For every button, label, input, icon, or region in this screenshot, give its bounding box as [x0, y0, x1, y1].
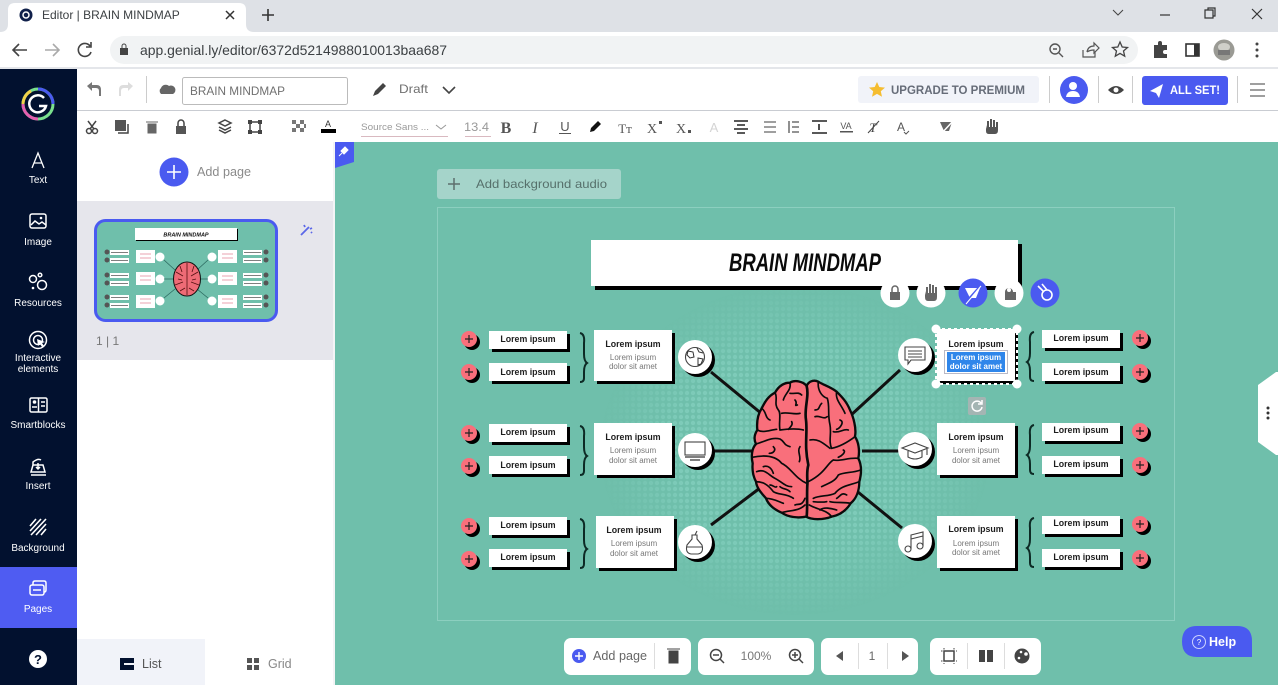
- connector lines: [711, 370, 902, 528]
- expand button: [461, 331, 480, 350]
- nav item: Smartblocks: Smartblocks: [10, 420, 66, 431]
- formatting toolbar: X: [647, 122, 657, 137]
- nav item: Insert: [25, 459, 51, 492]
- label box: Lorem ipsum: [1053, 552, 1109, 562]
- brace: [580, 519, 587, 568]
- main text box: dolor sit amet: [952, 548, 1001, 557]
- nav item: Image: [24, 214, 52, 248]
- formatting toolbar: 13.4: [464, 120, 489, 134]
- nav item: Smartblocks: [10, 398, 66, 431]
- top toolbar: Draft: [399, 82, 429, 96]
- label box: Lorem ipsum: [1053, 459, 1109, 469]
- grid tab: [205, 639, 333, 685]
- nav item: Resources: Resources: [14, 298, 62, 309]
- label box: Lorem ipsum: [500, 427, 556, 437]
- add page button: Add page: [197, 165, 251, 179]
- icon: music notes: [898, 524, 935, 561]
- add background audio button: [437, 169, 621, 199]
- nav item: Pages (active): Pages: [24, 604, 52, 615]
- label box: Lorem ipsum: [1053, 425, 1109, 435]
- nav item: Resources: [14, 273, 62, 309]
- bottom toolbar: page navigation: 1: [869, 649, 876, 663]
- brace: [1027, 332, 1034, 381]
- label box: Lorem ipsum: [1053, 333, 1109, 343]
- label box: [489, 363, 570, 384]
- label box: [1042, 423, 1123, 444]
- main text box: dolor sit amet: [952, 456, 1001, 465]
- left branch 2: [461, 423, 715, 478]
- label box: [1042, 516, 1123, 537]
- page thumbnail: [96, 220, 276, 320]
- expand button: [461, 518, 480, 537]
- page thumbnail: BRAIN MINDMAP: [163, 232, 209, 238]
- expand button: [461, 425, 480, 444]
- main text box: dolor sit amet: [610, 549, 659, 558]
- help icon: [29, 650, 47, 668]
- hand button: [916, 278, 946, 308]
- label box: [489, 424, 570, 445]
- right branch 3: [898, 516, 1151, 571]
- left branch 3: [461, 516, 715, 571]
- nav item: Insert: Insert: [25, 481, 51, 492]
- formatting toolbar: U: [560, 119, 570, 134]
- icon: flask: [678, 525, 715, 562]
- brain illustration: [752, 381, 861, 519]
- top toolbar: [77, 69, 1278, 111]
- nav item: Text: Text: [29, 175, 47, 186]
- right branch 2: [898, 423, 1151, 478]
- main text box, selected: Lorem ipsum: [951, 353, 1001, 362]
- formatting toolbar: I: [531, 120, 538, 137]
- bottom toolbar: pages: [564, 638, 691, 675]
- magnet button: [1030, 278, 1060, 308]
- main text box: Lorem ipsum: [605, 339, 661, 349]
- add background audio button: Add background audio: [476, 177, 607, 191]
- nav item: Background: [11, 519, 65, 554]
- bottom toolbar: pages: Add page: [593, 649, 647, 663]
- label box: Lorem ipsum: [500, 520, 556, 530]
- top toolbar: BRAIN MINDMAP: [190, 84, 285, 98]
- formatting toolbar: X: [676, 122, 686, 137]
- add page button: [160, 158, 251, 186]
- label box: Lorem ipsum: [500, 334, 556, 344]
- expand button: [1132, 457, 1151, 476]
- browser tab bar: Editor | BRAIN MINDMAP: [42, 8, 180, 22]
- help icon: ?: [34, 652, 42, 667]
- magic wand icon: [301, 225, 312, 235]
- nav item: Interactive elements: elements: [18, 364, 58, 375]
- top toolbar: UPGRADE TO PREMIUM: [891, 83, 1025, 97]
- main text box: [937, 516, 1018, 571]
- main text box: [937, 423, 1018, 478]
- formatting toolbar: A: [710, 120, 719, 135]
- brace: [1027, 518, 1034, 567]
- help button: ?: [1197, 638, 1202, 647]
- left branch 1: [461, 330, 715, 384]
- main text box: Lorem ipsum: [953, 539, 999, 548]
- main text box: Lorem ipsum: [948, 524, 1004, 534]
- pages panel: [77, 142, 335, 685]
- expand button: [1132, 550, 1151, 569]
- list tab: List: [142, 657, 162, 671]
- main text box: dolor sit amet: [609, 362, 658, 371]
- canvas background: [335, 142, 1278, 685]
- halftone background: [649, 322, 941, 578]
- bottom toolbar: page navigation: [821, 638, 918, 675]
- main text box, selected: dolor sit amet: [950, 362, 1003, 371]
- label box: [1042, 363, 1123, 384]
- expand button: [461, 364, 480, 383]
- formatting toolbar: B: [501, 120, 512, 137]
- main text box: [594, 423, 675, 478]
- main text box: [594, 330, 675, 384]
- label box: [1042, 456, 1123, 477]
- nav item: Background: Background: [11, 543, 65, 554]
- icon: graduation cap: [898, 432, 935, 469]
- rotate handle: [968, 397, 986, 415]
- label box: Lorem ipsum: [500, 552, 556, 562]
- formatting toolbar: T: [869, 120, 877, 135]
- help button: [1182, 626, 1252, 657]
- expand button: [1132, 423, 1151, 442]
- main text box: [596, 516, 677, 571]
- expand button: [1132, 330, 1151, 349]
- formatting toolbar: Source Sans ...: [361, 122, 429, 133]
- top toolbar: ALL SET!: [1170, 83, 1220, 97]
- label box: [489, 331, 570, 352]
- formatting toolbar: Tт: [618, 121, 632, 136]
- browser tab bar: [0, 0, 1278, 32]
- icon: speech bubble: [898, 338, 935, 375]
- expand button: [1132, 516, 1151, 535]
- title banner: [591, 240, 1022, 290]
- bottom toolbar: view options: [930, 638, 1041, 675]
- label box: [489, 517, 570, 538]
- nav item: Pages (active): [0, 567, 77, 628]
- formatting toolbar: A: [897, 120, 905, 134]
- page frame: [438, 208, 1174, 620]
- brace: [580, 426, 587, 475]
- bottom toolbar: zoom: [698, 638, 814, 675]
- icon: computer monitor: [678, 433, 715, 470]
- main text box, selected: [937, 329, 1018, 384]
- Genially logo: [23, 89, 53, 119]
- page counter: 1 | 1: [96, 334, 119, 348]
- bottom toolbar: zoom: 100%: [741, 649, 772, 663]
- label box: [489, 456, 570, 477]
- label box: Lorem ipsum: [1053, 367, 1109, 377]
- main text box: Lorem ipsum: [953, 446, 999, 455]
- label box: Lorem ipsum: [500, 460, 556, 470]
- help button: Help: [1209, 635, 1236, 649]
- nav item: Text: [29, 153, 47, 186]
- pin tab: [335, 142, 354, 168]
- main text box, selected: Lorem ipsum: [948, 339, 1004, 349]
- expand button: [461, 458, 480, 477]
- main text box: Lorem ipsum: [605, 432, 661, 442]
- side drawer handle: [1258, 372, 1278, 455]
- animation off button: [958, 278, 988, 308]
- browser address bar: [0, 32, 1278, 69]
- title banner: BRAIN MINDMAP: [729, 249, 881, 277]
- formatting toolbar: [77, 111, 1278, 142]
- main text box: dolor sit amet: [609, 456, 658, 465]
- brace: [1027, 425, 1034, 474]
- floating element controls: [880, 278, 1060, 308]
- interaction button: [994, 278, 1024, 308]
- grid tab: Grid: [268, 657, 292, 671]
- right branch 1 (selected): [898, 324, 1151, 415]
- label box: [489, 549, 570, 570]
- nav item: Interactive elements: Interactive: [15, 353, 62, 364]
- main text box: Lorem ipsum: [610, 353, 656, 362]
- browser address bar: app.genial.ly/editor/6372d5214988010013baa687: [140, 42, 447, 58]
- label box: [1042, 330, 1123, 351]
- main text box: Lorem ipsum: [948, 432, 1004, 442]
- expand button: [1132, 364, 1151, 383]
- main text box: Lorem ipsum: [606, 525, 662, 535]
- expand button: [461, 551, 480, 570]
- selection frame and handles: [932, 324, 1022, 388]
- label box: [1042, 549, 1123, 570]
- label box: Lorem ipsum: [1053, 518, 1109, 528]
- main text box: Lorem ipsum: [611, 539, 657, 548]
- nav item: Image: Image: [24, 237, 52, 248]
- formatting toolbar: VA: [840, 121, 852, 131]
- label box: Lorem ipsum: [500, 367, 556, 377]
- list tab: [77, 639, 205, 685]
- icon: globe: [678, 340, 715, 377]
- formatting toolbar: A: [325, 119, 331, 129]
- nav item: Interactive elements: [15, 332, 62, 375]
- lock button: [880, 278, 910, 308]
- brace: [580, 333, 587, 382]
- left navigation sidebar: [0, 69, 77, 685]
- main text box: Lorem ipsum: [610, 446, 656, 455]
